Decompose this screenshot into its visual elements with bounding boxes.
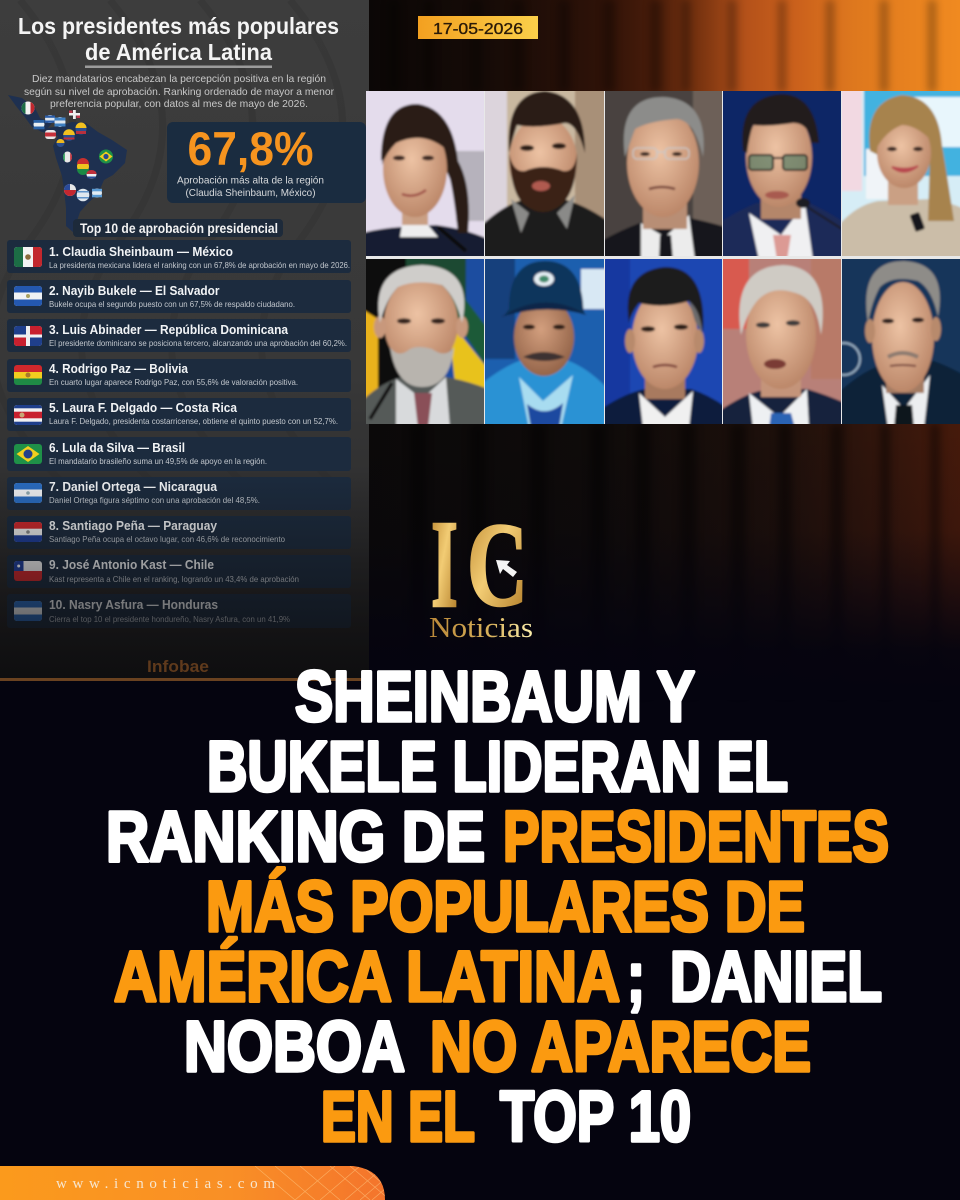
icon: cursor arrow — [496, 560, 517, 577]
row 1: Sheinbaum: La presidenta mexicana lidera el ranking con un 67,8% de aprobación en mayo de 2026. — [49, 260, 350, 270]
headline: BUKELE LIDERAN EL — [207, 728, 788, 807]
stat callout: 67,8%: (Claudia Sheinbaum, México) — [186, 187, 316, 199]
panel bottom line — [0, 678, 369, 681]
headline — [106, 658, 889, 1157]
row 2: Bukele: Bukele ocupa el segundo puesto con un 67,5% de respaldo ciudadano. — [49, 299, 295, 309]
row 5: Delgado: 5. Laura F. Delgado — Costa Rica — [49, 401, 238, 415]
curtain: top band — [366, 0, 960, 92]
headline: MÁS POPULARES DE — [206, 868, 805, 947]
logo: IC Noticias: C — [467, 498, 528, 631]
row 5: Delgado — [7, 398, 351, 431]
source: Infobae: Infobae — [147, 657, 209, 676]
panel title: de América Latina — [85, 39, 272, 65]
panel: infographic on the left — [0, 0, 369, 681]
row 5: Delgado: Laura F. Delgado, presidenta costarricense, obtiene el quinto puesto con un 52,7%. — [49, 416, 338, 426]
flag: Costa Rica — [14, 405, 42, 425]
flag: El Salvador — [14, 286, 42, 306]
row 1: Sheinbaum: 1. Claudia Sheinbaum — México — [49, 245, 233, 259]
panel intro text: preferencia popular, con datos al mes de mayo de 2026. — [50, 98, 308, 110]
row 7: Ortega: 7. Daniel Ortega — Nicaragua — [49, 480, 218, 494]
row 8: Peña: 8. Santiago Peña — Paraguay — [49, 519, 217, 533]
row 6: Lula: El mandatario brasileño suma un 49,5% de apoyo en la región. — [49, 456, 267, 466]
flag: Bolivia — [14, 365, 42, 385]
portrait: Santiago Peña — [605, 259, 722, 424]
row 9: Kast: Kast representa a Chile en el ranking, logrando un 43,4% de aprobación — [49, 574, 299, 584]
headline: DANIEL — [670, 938, 882, 1017]
map of Latin America with flags — [8, 95, 127, 233]
row 6: Lula — [7, 437, 351, 471]
row 8: Peña: Santiago Peña ocupa el octavo lugar, con 46,6% de reconocimiento — [49, 534, 285, 544]
list heading: Top 10 de aprobación presidencial — [80, 221, 278, 236]
headline: NO APARECE — [430, 1008, 811, 1087]
row 10: Asfura — [7, 594, 351, 628]
row 7: Ortega: Daniel Ortega figura séptimo con una aprobación del 48,5%. — [49, 495, 260, 505]
row 2: Bukele: 2. Nayib Bukele — El Salvador — [49, 284, 220, 298]
panel title: Los presidentes más populares — [18, 13, 339, 39]
portrait: Daniel Ortega — [485, 259, 604, 424]
portrait: Nasry Asfura — [842, 259, 960, 424]
date badge: 17-05-2026 — [433, 21, 523, 38]
flag: Chile — [14, 561, 42, 581]
row 3: Abinader: 3. Luis Abinader — República Dominicana — [49, 323, 289, 337]
headline: SHEINBAUM Y — [295, 658, 695, 737]
flag: Paraguay — [14, 522, 42, 542]
photo grid — [362, 87, 960, 428]
headline: AMÉRICA LATINA — [114, 938, 620, 1017]
logo: IC Noticias: I — [431, 496, 458, 634]
flag: Mexico — [14, 247, 42, 267]
headline: RANKING DE — [106, 798, 485, 877]
headline: ; — [627, 938, 645, 1017]
row 9: Kast: 9. José Antonio Kast — Chile — [49, 558, 214, 572]
curtain: middle band — [366, 424, 960, 700]
logo: IC Noticias — [429, 496, 533, 644]
portrait: Laura F. Delgado — [842, 91, 960, 256]
panel title — [18, 13, 339, 68]
portrait: Nayib Bukele — [485, 91, 604, 256]
row 4: Paz — [7, 359, 351, 392]
flag: Dominican Republic — [14, 326, 42, 346]
stat callout: 67,8% — [167, 122, 366, 203]
panel intro text: Diez mandatarios encabezan la percepción positiva en la región — [32, 73, 326, 85]
row 3: Abinader — [7, 319, 351, 352]
panel intro text: según su nivel de aprobación. Ranking ordenado de mayor a menor — [24, 86, 334, 98]
row 4: Paz: 4. Rodrigo Paz — Bolivia — [49, 362, 189, 376]
row 10: Asfura: 10. Nasry Asfura — Honduras — [49, 598, 218, 612]
panel intro text — [24, 73, 334, 110]
portrait: Claudia Sheinbaum — [366, 91, 484, 256]
headline: NOBOA — [184, 1008, 405, 1087]
row 1: Sheinbaum — [7, 240, 351, 273]
footer bar — [0, 1166, 412, 1200]
portrait: Rodrigo Paz — [723, 91, 841, 256]
flag: Honduras — [14, 601, 42, 621]
portrait: José Antonio Kast — [723, 259, 841, 424]
logo: IC Noticias: Noticias — [429, 612, 533, 644]
row 3: Abinader: El presidente dominicano se posiciona tercero, alcanzando una aprobación del 60,2%. — [49, 338, 347, 348]
row 8: Peña — [7, 516, 351, 549]
row 10: Asfura: Cierra el top 10 el presidente hondureño, Nasry Asfura, con un 41,9% — [49, 614, 291, 624]
panel bottom fade — [0, 470, 369, 680]
date badge — [418, 16, 538, 39]
panel background — [0, 0, 369, 680]
portrait: Lula da Silva — [366, 259, 484, 424]
headline: EN EL — [321, 1078, 475, 1157]
row 2: Bukele — [7, 280, 351, 313]
headline: TOP 10 — [500, 1078, 691, 1157]
stat callout: 67,8%: 67,8% — [188, 122, 314, 175]
flag: Nicaragua — [14, 483, 42, 503]
portrait: Luis Abinader — [605, 91, 722, 256]
row 7: Ortega — [7, 477, 351, 510]
row 9: Kast — [7, 555, 351, 588]
stat callout: 67,8%: Aprobación más alta de la región — [177, 174, 324, 186]
footer bar: www.icnoticias.com — [56, 1176, 275, 1192]
row 6: Lula: 6. Lula da Silva — Brasil — [49, 441, 185, 455]
row 4: Paz: En cuarto lugar aparece Rodrigo Paz, con 55,6% de valoración positiva. — [49, 377, 298, 387]
flag: Brazil — [14, 444, 42, 464]
